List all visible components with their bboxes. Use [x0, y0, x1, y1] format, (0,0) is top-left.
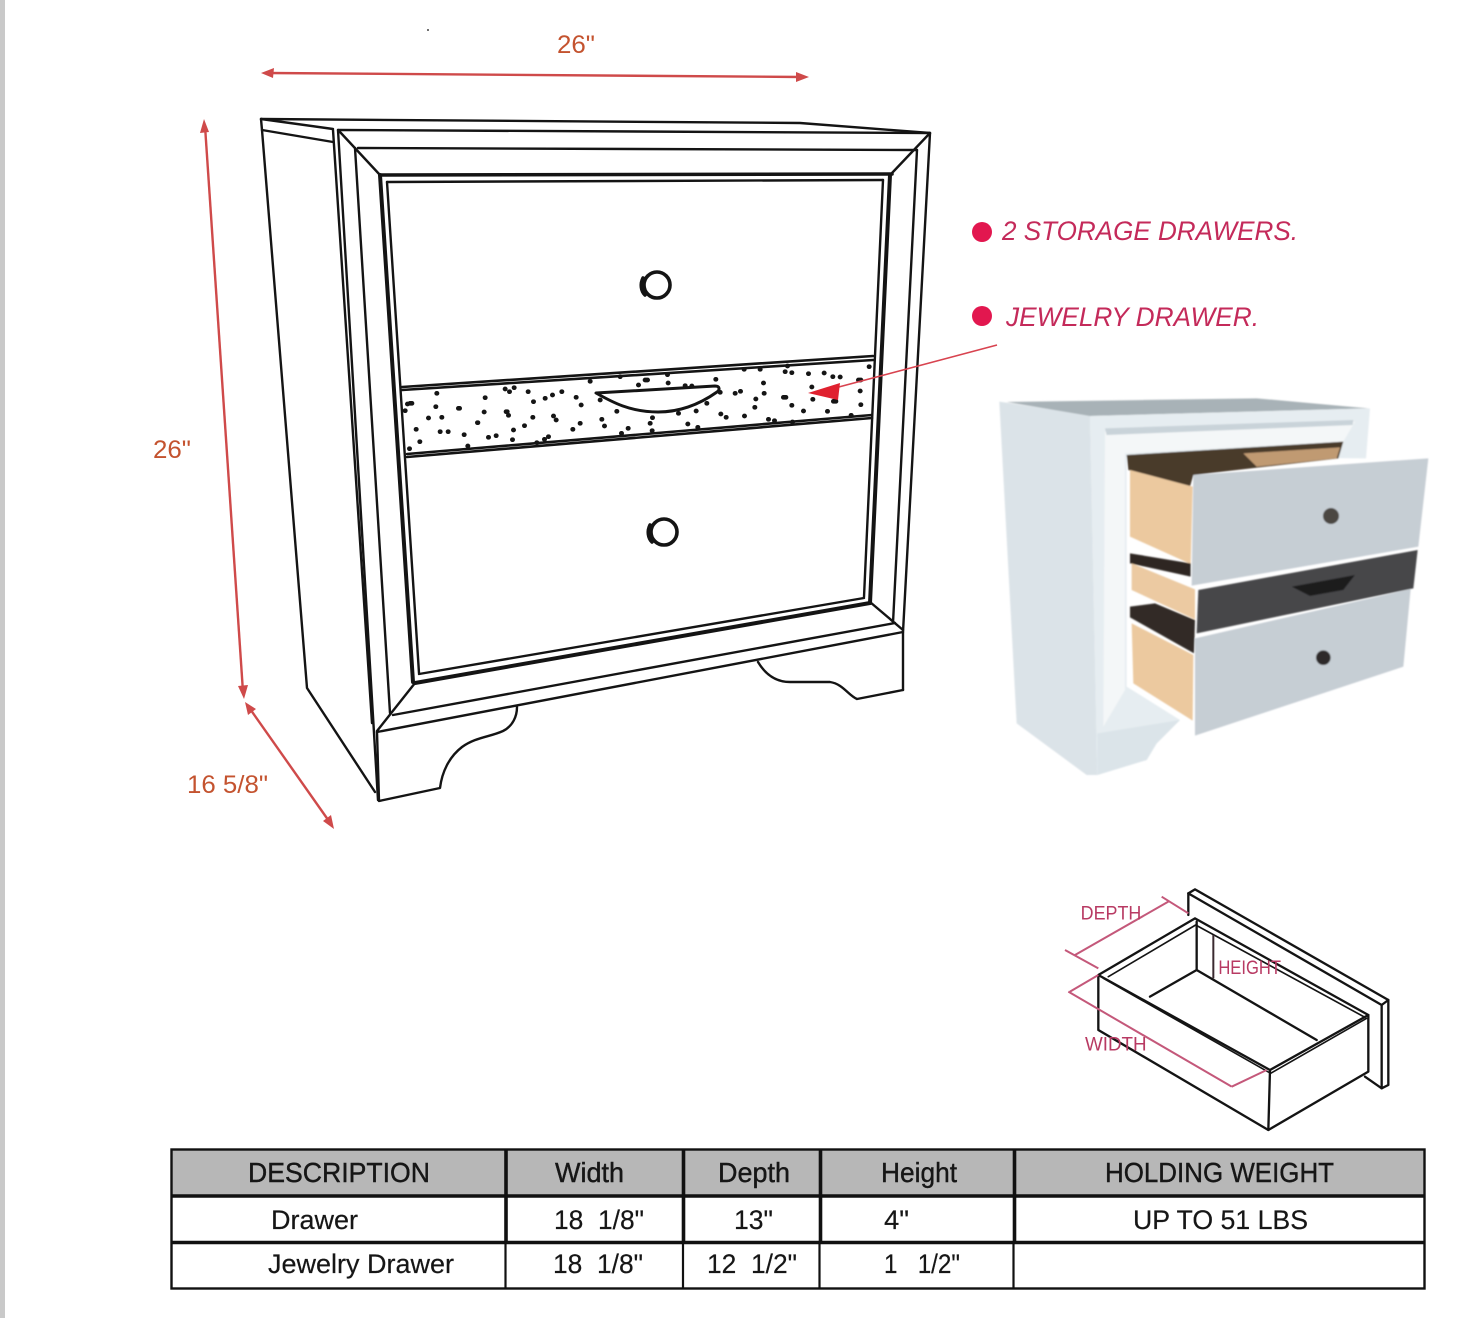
table header row: Width [555, 1157, 624, 1188]
table row: jewelry drawer: 12 1/2" [707, 1249, 797, 1279]
product photo: open nightstand [999, 398, 1428, 775]
table header row: DESCRIPTION [248, 1157, 430, 1188]
table row: drawer: UP TO 51 LBS [1133, 1205, 1308, 1235]
nightstand side panel and top [261, 119, 930, 792]
dimension: height 26 inches [153, 119, 248, 699]
table header row: Depth [718, 1157, 790, 1188]
feature: storage drawers: 2 STORAGE DRAWERS. [1001, 216, 1298, 246]
table row: drawer: 4" [884, 1205, 909, 1235]
jewelry drawer band [402, 356, 873, 457]
table header background [172, 1150, 1424, 1196]
photo: drawer interiors [1127, 442, 1343, 721]
nightstand front frame [333, 130, 930, 800]
jewelry drawer handle [596, 386, 719, 412]
diagram: drawer lines [1098, 889, 1388, 1130]
table grid [171, 1149, 1424, 1289]
feature: jewelry drawer: JEWELRY DRAWER. [1005, 302, 1259, 332]
dimension: top width 26 inches: 26" [557, 31, 595, 59]
table header row: Height [881, 1157, 957, 1188]
table row: drawer: 18 1/8" [554, 1205, 644, 1235]
table row: jewelry drawer: 18 1/8" [553, 1249, 643, 1279]
nightstand feet [377, 662, 903, 801]
diagram: measurement guides [1065, 897, 1267, 1087]
table row: drawer: 13" [734, 1205, 773, 1235]
dimension: depth 16 5/8 inches: 16 5/8" [187, 771, 268, 799]
dimension: depth 16 5/8 inches [187, 702, 334, 829]
diagram: labels: WIDTH [1085, 1035, 1147, 1056]
diagram: labels [1081, 903, 1281, 1056]
jewelry drawer speckles [405, 366, 869, 449]
top drawer knob [641, 272, 670, 298]
table row: jewelry drawer: Jewelry Drawer [268, 1249, 454, 1279]
table row: jewelry drawer [268, 1249, 960, 1279]
photo: drawer fronts [1192, 458, 1428, 736]
line drawing: nightstand [261, 119, 930, 801]
dimension: height 26 inches: 26" [153, 436, 191, 464]
photo: drawer knobs [1316, 508, 1339, 665]
dimension: top width 26 inches [261, 31, 809, 82]
callout arrow to jewelry drawer [808, 345, 997, 400]
diagram: labels: HEIGHT [1218, 958, 1281, 979]
table row: drawer [271, 1205, 1308, 1235]
photo: cabinet body [999, 398, 1370, 775]
table row: drawer: Drawer [271, 1205, 358, 1235]
table header row [248, 1157, 1334, 1188]
table header row: HOLDING WEIGHT [1105, 1157, 1334, 1188]
drawer measurement diagram [1065, 889, 1388, 1130]
bottom drawer knob [648, 519, 677, 545]
specification table [171, 1149, 1424, 1289]
table row: jewelry drawer: 1 1/2" [884, 1249, 960, 1279]
diagram: labels: DEPTH [1081, 903, 1141, 924]
